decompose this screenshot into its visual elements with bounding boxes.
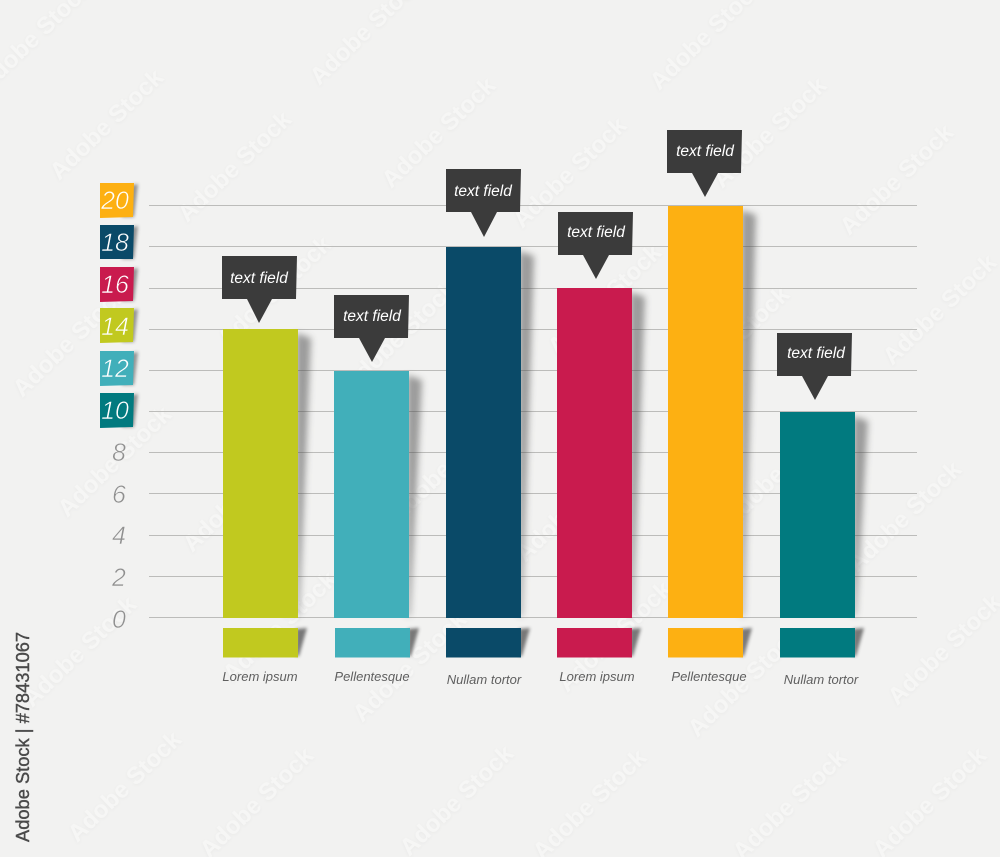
bar chart infographic: Adobe Stock — [173, 105, 297, 227]
scale chip 10: 10 — [101, 397, 129, 425]
callout 6: text field — [787, 345, 846, 362]
bar chart infographic: Adobe Stock — [45, 63, 169, 185]
y axis scale — [100, 183, 138, 634]
callout 3: text field — [454, 183, 513, 200]
category labels: Nullam tortor — [447, 672, 522, 687]
bar chart infographic: Adobe Stock — [63, 725, 187, 847]
category tab 5 — [668, 628, 752, 658]
callout 2 — [334, 295, 409, 362]
bar chart infographic: Adobe Stock — [213, 230, 337, 352]
callout 5 — [667, 130, 742, 197]
bar chart infographic: Adobe Stock — [338, 275, 462, 397]
category tab 3 — [446, 628, 530, 658]
bar chart infographic: Adobe Stock — [178, 435, 302, 557]
bar chart infographic: Adobe Stock — [708, 71, 832, 193]
callout 6 — [777, 333, 852, 400]
bar chart infographic: Adobe Stock — [18, 590, 142, 712]
bar 3: navy, value 18 — [446, 247, 534, 618]
category tab 2 — [335, 628, 419, 658]
scale chip 18 — [100, 225, 138, 259]
bar chart infographic: Adobe Stock — [508, 111, 632, 233]
bar 1: lime, value 14 — [223, 329, 311, 618]
plain axis numbers: 8 — [112, 439, 126, 467]
stock id side text: Adobe Stock | #78431067 — [12, 632, 33, 842]
bar chart infographic: Adobe Stock — [377, 71, 501, 193]
plain axis numbers: 0 — [112, 606, 126, 634]
bar chart infographic: Adobe Stock — [835, 118, 959, 240]
callout 1 — [222, 256, 297, 323]
bar 6: dark teal, value 10 — [780, 412, 868, 618]
callout 4: text field — [567, 224, 626, 241]
bar chart infographic: Adobe Stock — [348, 605, 472, 727]
scale chip 18: 18 — [101, 229, 129, 257]
scale chip 12 — [100, 351, 138, 386]
category labels: Nullam tortor — [784, 672, 859, 687]
bar chart infographic: Adobe Stock — [511, 445, 635, 567]
scale chip 16 — [100, 267, 138, 302]
category labels: Lorem ipsum — [222, 669, 298, 684]
bar chart infographic: Adobe Stock — [8, 280, 132, 402]
bar chart infographic: Adobe Stock — [671, 280, 795, 402]
bar chart infographic: Adobe Stock — [878, 248, 1000, 370]
callout 2: text field — [343, 308, 402, 325]
callout 3 — [446, 169, 521, 237]
category tab 4 — [557, 628, 641, 658]
scale chip 14 — [100, 308, 138, 343]
scale chip 20 — [100, 183, 138, 218]
bar 5: amber, value 20 — [668, 206, 756, 618]
bar chart infographic: Adobe Stock — [53, 400, 177, 522]
bar chart infographic: Adobe Stock — [385, 405, 509, 527]
category labels: Lorem ipsum — [559, 669, 635, 684]
scale chip 20: 20 — [100, 187, 129, 215]
callout 5: text field — [676, 143, 735, 160]
grid lines — [149, 206, 917, 618]
callout 4 — [558, 212, 633, 279]
category labels — [222, 669, 859, 687]
category labels: Pellentesque — [671, 669, 747, 684]
bar chart infographic: Adobe Stock — [543, 238, 667, 360]
bar chart infographic: Adobe Stock — [553, 575, 677, 697]
category tab 1 — [223, 628, 307, 658]
bar chart infographic: Adobe Stock — [718, 410, 842, 532]
plain axis numbers: 4 — [112, 522, 126, 550]
plain axis numbers: 6 — [112, 481, 126, 509]
bar chart infographic: Adobe Stock — [683, 620, 807, 742]
callout 1: text field — [230, 270, 289, 287]
bar chart infographic: Adobe Stock — [218, 565, 342, 687]
category labels: Pellentesque — [334, 669, 410, 684]
bar chart infographic: Adobe Stock — [843, 455, 967, 577]
category tab 6 — [780, 628, 864, 658]
bar 2: teal-blue, value 12 — [334, 371, 422, 618]
bar 4: crimson, value 16 — [557, 288, 645, 618]
scale chip 16: 16 — [101, 271, 129, 299]
plain axis numbers: 2 — [111, 564, 126, 592]
plain axis numbers — [111, 439, 126, 634]
scale chip 14: 14 — [101, 313, 129, 341]
scale chip 10 — [100, 393, 138, 428]
scale chip 12: 12 — [101, 355, 129, 383]
